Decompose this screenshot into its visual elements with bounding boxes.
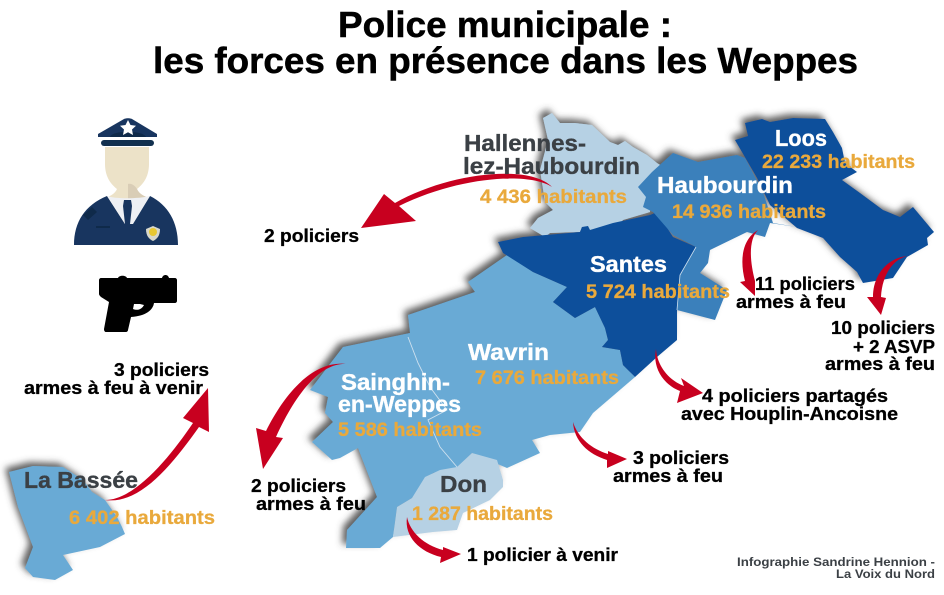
commune: Haubourdin [638,153,797,320]
label: Sainghin-en-Weppes: Sainghin- [341,369,450,395]
icon: policier [74,118,178,245]
arrow: Loos vers 10 policiers [867,256,907,315]
label: Wavrin: Wavrin [468,339,549,365]
commune: Loos [735,118,934,283]
label: Haubourdin: Haubourdin [657,172,793,198]
callout: 10 policiers: armes à feu [825,354,935,374]
label: Hallennes-lez-Haubourdin [463,130,640,208]
label: Wavrin [468,339,619,389]
label: Loos [762,125,915,173]
label: La Bassée [24,467,215,529]
label: Santes: 5 724 habitants [586,281,730,303]
label: Loos: Loos [775,125,827,151]
callout: 3 policiers Wavrin: 3 policiers [633,448,729,468]
label: Sainghin-en-Weppes [338,369,482,441]
label: La Bassée: La Bassée [24,467,138,493]
callout: 4 policiers partagés [681,386,898,424]
label: Sainghin-en-Weppes: en-Weppes [338,391,461,417]
callout: 10 policiers [825,318,935,374]
callout: 4 policiers partagés: avec Houplin-Ancoisne [681,404,898,424]
label: Haubourdin [657,172,826,223]
callout: 1 policier à venir: 1 policier à venir [467,545,618,565]
arrow: Haubourdin vers 11 policiers [740,230,758,296]
label: Hallennes-lez-Haubourdin: Hallennes- [464,130,586,156]
callout: 11 policiers: armes à feu [736,292,846,312]
label: Hallennes-lez-Haubourdin: lez-Haubourdin [463,153,640,179]
callout: 3 policiers Wavrin [613,448,729,486]
callout: 10 policiers: + 2 ASVP [853,337,935,357]
callout: 11 policiers [736,274,855,312]
commune: Santes [498,212,696,377]
title: les forces en présence dans les Weppes [153,40,858,81]
callout: 2 policiers Sainghin: 2 policiers [251,476,346,496]
arrow: Sainghin vers 2 policiers [256,364,347,469]
credit: Infographie Sandrine Hennion - [737,557,935,569]
icon: pistolet [99,275,177,332]
callout: 3 policiers La Bassée: 3 policiers [114,360,209,380]
callout: 3 policiers La Bassée: armes à feu à venir [24,378,203,398]
arrow: Hallennes vers 2 policiers [361,174,552,228]
commune: Wavrin et Sainghin-en-Weppes [310,255,635,548]
title [153,4,858,81]
callout: 2 policiers Hallennes: 2 policiers [264,226,359,246]
callout: 3 policiers La Bassée [24,360,209,398]
label: Santes [586,251,730,303]
map: communes des Weppes [9,113,934,580]
label: Loos: 22 233 habitants [762,151,915,173]
callout: 4 policiers partagés: 4 policiers partagés [702,386,888,406]
credit [737,557,935,581]
callout: 11 policiers: 11 policiers [755,274,855,294]
label: Don [412,471,553,525]
arrow: La Bassée vers 3 policiers [105,388,209,500]
callout: 3 policiers Wavrin: armes à feu [613,466,723,486]
commune: Hallennes-lez-Haubourdin [530,113,665,237]
arrow: Santes vers 4 policiers [655,349,703,403]
credit: La Voix du Nord [836,569,935,581]
label: Santes: Santes [590,251,667,277]
commune: La Bassée [9,466,125,580]
callout: 10 policiers: 10 policiers [831,318,935,338]
label: Haubourdin: 14 936 habitants [672,201,826,223]
label: La Bassée: 6 402 habitants [69,507,215,529]
label: Hallennes-lez-Haubourdin: 4 436 habitants [480,186,627,208]
label: Don: 1 287 habitants [412,503,553,525]
callout: 2 policiers Sainghin: armes à feu [256,494,366,514]
callout: 2 policiers Sainghin [251,476,366,514]
arrow: Wavrin vers 3 policiers [573,422,627,468]
label: Wavrin: 7 676 habitants [475,367,619,389]
commune: Don [393,453,503,537]
label: Don: Don [440,471,487,497]
label: Sainghin-en-Weppes: 5 586 habitants [338,419,482,441]
arrow: Don vers 1 policier [407,517,461,563]
title: Police municipale : [338,4,672,45]
